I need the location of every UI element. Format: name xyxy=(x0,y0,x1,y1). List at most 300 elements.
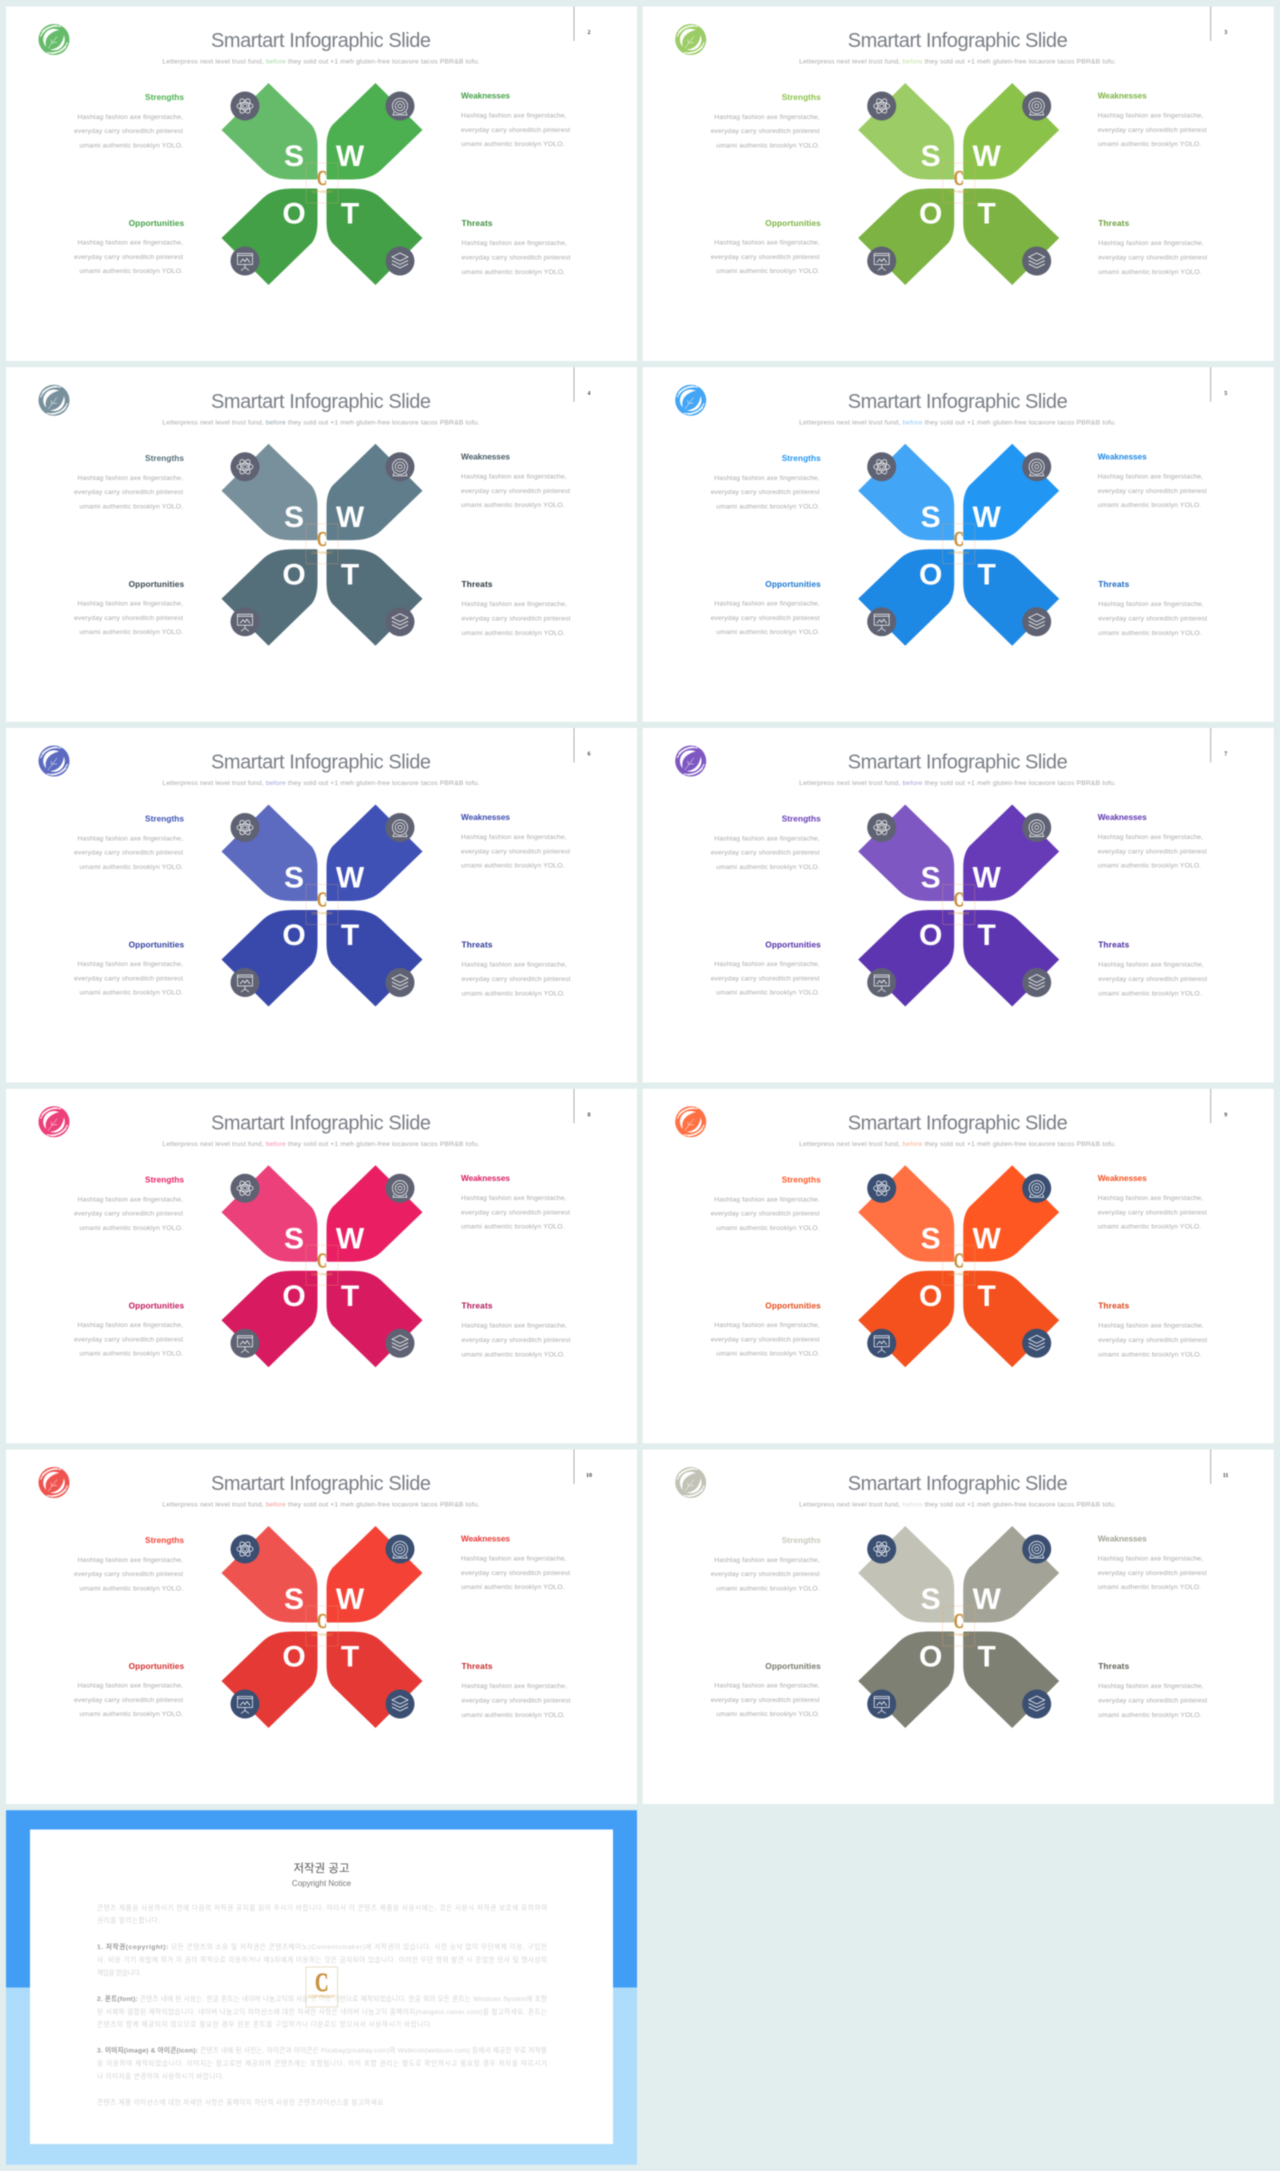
swot diagram xyxy=(858,804,1059,1006)
text block: strengths xyxy=(711,92,821,150)
text block: threats: umami authentic brooklyn YOLO. xyxy=(1098,1351,1202,1358)
text block: threats: Threats xyxy=(1098,1661,1130,1671)
text block: weaknesses: everyday carry shoreditch pinterest xyxy=(1098,127,1207,134)
text block: threats: everyday carry shoreditch pinterest xyxy=(1098,254,1207,262)
text block: threats xyxy=(462,579,571,637)
petal W: W xyxy=(336,1222,365,1255)
slide background xyxy=(643,728,1274,1082)
text block: opportunities xyxy=(74,1661,184,1718)
icon: layers xyxy=(1022,1329,1051,1358)
text block: opportunities: umami authentic brooklyn YOLO. xyxy=(716,629,820,636)
text block: threats: Threats xyxy=(462,1300,493,1310)
petal W xyxy=(326,1165,422,1262)
petal O: O xyxy=(919,1280,942,1313)
watermark: C xyxy=(954,1609,964,1633)
text block: strengths xyxy=(711,453,821,510)
logo xyxy=(38,746,70,776)
petal O xyxy=(222,549,318,646)
text block: strengths: umami authentic brooklyn YOLO. xyxy=(716,1225,820,1232)
petal T xyxy=(326,549,422,646)
text block: weaknesses: Weaknesses xyxy=(1098,812,1147,822)
text block: threats: umami authentic brooklyn YOLO. xyxy=(1098,1712,1202,1719)
text block: weaknesses: Weaknesses xyxy=(1098,1534,1147,1544)
text block: opportunities: Hashtag fashion axe fingerstache, xyxy=(714,240,820,246)
petal O: O xyxy=(919,558,942,591)
text block: opportunities: everyday carry shoreditch pinterest xyxy=(711,1697,820,1704)
petal W: W xyxy=(336,1583,365,1616)
petal W: W xyxy=(973,140,1002,173)
icon: atom xyxy=(867,813,896,842)
petal W xyxy=(326,83,422,180)
text block: strengths: umami authentic brooklyn YOLO. xyxy=(80,1225,183,1232)
text block: threats: everyday carry shoreditch pinterest xyxy=(462,1698,571,1704)
text block: threats: everyday carry shoreditch pinterest xyxy=(1098,1337,1207,1344)
text block: strengths: everyday carry shoreditch pinterest xyxy=(74,128,183,135)
petal W: W xyxy=(336,140,365,173)
text block: opportunities: umami authentic brooklyn YOLO. xyxy=(80,268,183,275)
text block: threats xyxy=(1098,1661,1207,1719)
slide 1: green xyxy=(6,6,637,361)
text block: opportunities: umami authentic brooklyn YOLO. xyxy=(80,1350,183,1357)
notice text: 사, 비용 기기 위법에 의거 이 권리 목적으로 이용하거나 제3자에게 이용하는 것은 금지되어 있습니다. 이러한 무단 행위 발견 시 준엄한 민사 및 형사상의 xyxy=(97,1955,547,1964)
icon: layers xyxy=(1022,246,1051,276)
text block: opportunities: Hashtag fashion axe fingerstache, xyxy=(714,1322,820,1329)
watermark: C xyxy=(317,527,327,551)
text block: strengths xyxy=(74,453,184,510)
text block: opportunities: everyday carry shoreditch pinterest xyxy=(711,976,820,982)
text block: weaknesses: Hashtag fashion axe fingerstache, xyxy=(1098,1195,1203,1202)
page number: 2 xyxy=(588,30,590,36)
slide background xyxy=(6,1450,637,1804)
text block: weaknesses: Hashtag fashion axe fingerstache, xyxy=(461,473,567,480)
watermark: C xyxy=(954,166,964,190)
petal S xyxy=(222,1526,318,1622)
text block: threats: everyday carry shoreditch pinterest xyxy=(462,254,571,262)
title: Smartart Infographic Slide xyxy=(211,1473,431,1495)
slide 3: blue grey xyxy=(6,367,637,722)
title: Smartart Infographic Slide xyxy=(848,1112,1068,1134)
text block: strengths: Strengths xyxy=(782,92,821,102)
text block: strengths: Strengths xyxy=(782,1535,821,1545)
text block: strengths: umami authentic brooklyn YOLO. xyxy=(80,142,183,150)
text block: opportunities: Opportunities xyxy=(765,218,821,228)
page number xyxy=(1211,1450,1228,1484)
text block: opportunities: everyday carry shoreditch pinterest xyxy=(74,615,183,622)
watermark: COPYRIGHT xyxy=(311,1272,333,1276)
icon: layers xyxy=(386,1690,414,1718)
subtitle: Letterpress next level trust fund, before they sold out +1 meh gluten-free locavore tacos PBR&B tofu. xyxy=(799,780,1116,787)
text block: strengths: Hashtag fashion axe fingerstache, xyxy=(714,475,820,482)
petal W xyxy=(963,83,1059,180)
text block: opportunities: everyday carry shoreditch pinterest xyxy=(74,976,183,982)
watermark: C xyxy=(317,888,327,912)
slide 2: light green xyxy=(643,6,1274,361)
icon: presentation xyxy=(867,968,896,997)
text block: opportunities: Hashtag fashion axe fingerstache, xyxy=(78,961,183,968)
text block: opportunities: everyday carry shoreditch pinterest xyxy=(74,1697,183,1704)
title: Smartart Infographic Slide xyxy=(211,752,431,774)
text block: weaknesses: umami authentic brooklyn YOLO. xyxy=(461,502,565,509)
text block: strengths: everyday carry shoreditch pinterest xyxy=(74,1210,183,1217)
petal T xyxy=(963,549,1059,646)
text block: opportunities xyxy=(74,940,184,996)
petal O xyxy=(858,910,954,1006)
icon: layers xyxy=(386,246,414,276)
text block: threats: Hashtag fashion axe fingerstache, xyxy=(1098,962,1204,968)
text block: weaknesses: Hashtag fashion axe fingerstache, xyxy=(461,1556,567,1562)
icon: presentation xyxy=(867,1690,896,1718)
logo xyxy=(675,746,706,776)
text block: threats: Threats xyxy=(462,579,493,589)
page number xyxy=(1211,728,1227,762)
icon: target xyxy=(386,813,414,842)
petal O xyxy=(858,188,954,285)
notice text: 1. 저작권(copyright): 모든 콘텐츠의 소유 및 저작권은 콘텐츠메이노(Contentsmaker)에 저작권이 있습니다. 사전 승낙 없이 무단복제 이용, 구입한 xyxy=(97,1942,547,1951)
watermark: C xyxy=(954,888,964,912)
panel: copyright notice xyxy=(6,1810,637,2165)
text block: threats: umami authentic brooklyn YOLO. xyxy=(1098,269,1202,276)
icon: atom xyxy=(867,92,896,120)
text block: opportunities: umami authentic brooklyn YOLO. xyxy=(80,629,183,636)
logo xyxy=(675,24,706,55)
text block: weaknesses xyxy=(1098,451,1207,509)
slide background xyxy=(643,367,1274,722)
slide 7: pink xyxy=(6,1089,637,1443)
icon: target xyxy=(386,1174,414,1203)
petal T xyxy=(963,910,1059,1006)
petal W: W xyxy=(973,862,1002,894)
text block: opportunities xyxy=(711,579,821,636)
icon: presentation xyxy=(230,1690,260,1718)
notice text: 권리를 알리는합니다. xyxy=(97,1916,160,1925)
text block: weaknesses: umami authentic brooklyn YOLO. xyxy=(1098,141,1201,148)
text block: weaknesses: Hashtag fashion axe fingerstache, xyxy=(461,1195,567,1202)
watermark: C xyxy=(317,166,327,190)
text block: weaknesses xyxy=(1098,812,1207,870)
text block: strengths: everyday carry shoreditch pinterest xyxy=(711,850,820,856)
page number xyxy=(574,6,590,41)
slide 8: deep orange xyxy=(643,1089,1274,1443)
text block: threats xyxy=(462,940,571,998)
icon: layers xyxy=(1022,1690,1051,1718)
icon: presentation xyxy=(867,246,896,276)
watermark: C xyxy=(317,1248,327,1272)
watermark: COPYRIGHT xyxy=(948,1633,970,1637)
swot diagram xyxy=(222,83,422,285)
page number: 6 xyxy=(588,752,590,758)
text block: opportunities: Hashtag fashion axe fingerstache, xyxy=(78,240,183,246)
title: Smartart Infographic Slide xyxy=(211,391,431,413)
icon: target xyxy=(1022,1174,1051,1203)
text block: threats: Threats xyxy=(462,940,493,950)
watermark: COPYRIGHT xyxy=(311,1633,333,1637)
petal W xyxy=(963,1165,1059,1262)
logo xyxy=(38,385,70,416)
text block: threats: umami authentic brooklyn YOLO. xyxy=(462,1351,565,1358)
text block: weaknesses: Weaknesses xyxy=(461,1534,510,1544)
text block: opportunities: Opportunities xyxy=(765,1661,821,1671)
slide background xyxy=(6,6,637,361)
text block: opportunities xyxy=(74,579,184,636)
petal T: T xyxy=(978,919,996,952)
text block: opportunities: Hashtag fashion axe fingerstache, xyxy=(78,1322,183,1329)
title: Smartart Infographic Slide xyxy=(848,391,1068,413)
watermark xyxy=(943,524,975,564)
text block: weaknesses: everyday carry shoreditch pinterest xyxy=(461,488,570,495)
text block: threats: Threats xyxy=(1098,218,1130,228)
text block: threats: everyday carry shoreditch pinterest xyxy=(1098,615,1207,622)
text block: threats: everyday carry shoreditch pinterest xyxy=(1098,1698,1207,1704)
petal S: S xyxy=(284,862,304,894)
text block: opportunities: Opportunities xyxy=(129,940,184,950)
text block: weaknesses xyxy=(461,1534,570,1591)
swot diagram xyxy=(858,444,1059,646)
logo xyxy=(38,1106,70,1137)
text block: threats xyxy=(462,1661,571,1719)
petal W xyxy=(963,1526,1059,1622)
text block: weaknesses: everyday carry shoreditch pinterest xyxy=(1098,1570,1207,1577)
slide background xyxy=(6,728,637,1082)
petal W: W xyxy=(973,1583,1002,1616)
petal S xyxy=(222,83,318,180)
swot diagram xyxy=(222,1526,422,1728)
subtitle: Letterpress next level trust fund, before they sold out +1 meh gluten-free locavore tacos PBR&B tofu. xyxy=(162,58,480,66)
text block: opportunities: umami authentic brooklyn YOLO. xyxy=(716,1350,820,1357)
icon: target xyxy=(386,92,414,120)
petal T: T xyxy=(341,1280,359,1313)
text block: strengths: umami authentic brooklyn YOLO. xyxy=(80,864,183,871)
text block: weaknesses: Hashtag fashion axe fingerstache, xyxy=(1098,834,1203,841)
petal S: S xyxy=(921,140,941,173)
watermark: COPYRIGHT xyxy=(308,1994,335,1999)
petal T xyxy=(963,1632,1059,1728)
text block: strengths: everyday carry shoreditch pinterest xyxy=(711,1210,820,1217)
slide background xyxy=(643,1450,1274,1804)
petal T: T xyxy=(341,558,359,591)
icon: target xyxy=(1022,813,1051,842)
text block: strengths: Hashtag fashion axe fingerstache, xyxy=(714,836,820,842)
icon: presentation xyxy=(230,968,260,997)
petal S: S xyxy=(284,1583,304,1616)
icon: atom xyxy=(867,1534,896,1564)
text block: opportunities: Opportunities xyxy=(129,579,184,589)
petal S xyxy=(222,804,318,901)
petal S xyxy=(858,83,954,180)
watermark: COPYRIGHT xyxy=(311,912,333,916)
watermark: C xyxy=(954,527,964,551)
petal W: W xyxy=(336,862,365,894)
watermark: COPYRIGHT xyxy=(948,912,970,916)
text block: weaknesses: Weaknesses xyxy=(461,451,510,461)
watermark xyxy=(943,884,975,924)
icon: presentation xyxy=(230,1329,260,1358)
page number xyxy=(1211,367,1227,402)
page number: 8 xyxy=(588,1112,590,1118)
subtitle: Letterpress next level trust fund, before they sold out +1 meh gluten-free locavore tacos PBR&B tofu. xyxy=(162,419,480,426)
text block: strengths: umami authentic brooklyn YOLO. xyxy=(80,503,183,510)
notice text: 콘텐츠 제품을 사용하시기 전에 다음의 저작권 공지를 읽어 주시기 바랍니다. 따라서 이 콘텐츠 제품을 사용시에는, 것은 사용시 저작권 보호에 유의하여 xyxy=(97,1903,547,1912)
watermark: COPYRIGHT xyxy=(311,551,333,555)
text block: opportunities: everyday carry shoreditch pinterest xyxy=(711,254,820,261)
text block: opportunities: Opportunities xyxy=(129,1661,184,1671)
icon: layers xyxy=(1022,607,1051,636)
text block: strengths: everyday carry shoreditch pinterest xyxy=(711,1571,820,1578)
text block: strengths: umami authentic brooklyn YOLO. xyxy=(716,864,820,871)
petal T: T xyxy=(341,198,359,230)
swot diagram xyxy=(858,83,1059,285)
title: Smartart Infographic Slide xyxy=(848,752,1068,774)
petal S: S xyxy=(921,1583,941,1616)
text block: weaknesses xyxy=(461,451,570,509)
text block: threats: everyday carry shoreditch pinterest xyxy=(462,615,571,622)
slide background xyxy=(6,1089,637,1443)
petal O: O xyxy=(282,1280,306,1313)
watermark xyxy=(306,884,338,924)
subtitle: Letterpress next level trust fund, before they sold out +1 meh gluten-free locavore tacos PBR&B tofu. xyxy=(162,1141,480,1148)
text block: strengths xyxy=(711,1535,821,1592)
petal T xyxy=(963,188,1059,285)
title: Smartart Infographic Slide xyxy=(211,30,431,52)
text block: threats: Threats xyxy=(1098,940,1130,950)
page number: 9 xyxy=(1224,1112,1227,1118)
text block: threats: umami authentic brooklyn YOLO. xyxy=(462,1712,565,1719)
white card xyxy=(30,1830,613,2144)
text block: strengths: Strengths xyxy=(782,453,821,463)
text block: weaknesses: Hashtag fashion axe fingerstache, xyxy=(1098,473,1203,480)
petal S xyxy=(858,444,954,540)
text block: strengths: Strengths xyxy=(782,1174,821,1184)
page number: 7 xyxy=(1224,752,1227,758)
text block: threats: Threats xyxy=(1098,579,1130,589)
text block: opportunities: umami authentic brooklyn YOLO. xyxy=(80,1711,183,1718)
petal O xyxy=(858,1632,954,1728)
text block: threats: Hashtag fashion axe fingerstache, xyxy=(1098,1322,1204,1329)
subtitle: Letterpress next level trust fund, before they sold out +1 meh gluten-free locavore tacos PBR&B tofu. xyxy=(162,780,480,787)
text block: threats: Hashtag fashion axe fingerstache, xyxy=(1098,240,1204,247)
text block: threats: umami authentic brooklyn YOLO. xyxy=(1098,630,1202,637)
page number: 4 xyxy=(588,391,590,397)
petal T xyxy=(326,910,422,1006)
text block: strengths xyxy=(74,1174,184,1232)
petal S: S xyxy=(284,501,304,534)
text block: weaknesses xyxy=(1098,91,1207,148)
text block: strengths: Strengths xyxy=(145,92,184,102)
text block: strengths: Hashtag fashion axe fingerstache, xyxy=(714,1557,820,1564)
text block: weaknesses: everyday carry shoreditch pinterest xyxy=(461,1209,570,1216)
icon: layers xyxy=(386,607,414,636)
petal S: S xyxy=(921,862,941,894)
petal T: T xyxy=(978,1640,996,1674)
text block: weaknesses: everyday carry shoreditch pinterest xyxy=(461,127,570,134)
icon: target xyxy=(1022,1534,1051,1564)
petal O: O xyxy=(282,1640,306,1674)
text block: threats: Threats xyxy=(1098,1300,1130,1310)
text block: weaknesses: Hashtag fashion axe fingerstache, xyxy=(1098,112,1203,120)
text block: strengths: everyday carry shoreditch pinterest xyxy=(74,1571,183,1578)
text block: weaknesses: umami authentic brooklyn YOLO. xyxy=(1098,1584,1201,1591)
subtitle: Letterpress next level trust fund, before they sold out +1 meh gluten-free locavore tacos PBR&B tofu. xyxy=(162,1502,480,1508)
icon: presentation xyxy=(230,246,260,276)
text block: strengths: Strengths xyxy=(145,814,184,824)
icon: atom xyxy=(867,452,896,481)
text block: strengths: Hashtag fashion axe fingerstache, xyxy=(78,1196,183,1203)
text block: threats: Hashtag fashion axe fingerstache, xyxy=(1098,601,1204,608)
text block: strengths: umami authentic brooklyn YOLO. xyxy=(80,1586,183,1592)
notice text: 을 이용하여 제작되었습니다. 이미지는 참고로만 제공되며 콘텐츠에는 포함됩니다. 이미 포함 권리는 별도로 확인하시고 필요할 경우 저자를 따르시거 xyxy=(97,2059,547,2068)
petal W xyxy=(326,1526,422,1622)
text block: weaknesses: everyday carry shoreditch pinterest xyxy=(461,1570,570,1577)
text block: weaknesses: Weaknesses xyxy=(461,91,510,101)
icon: presentation xyxy=(867,607,896,636)
icon: presentation xyxy=(230,607,260,636)
text block: strengths xyxy=(74,92,184,150)
petal S xyxy=(858,1165,954,1262)
icon: target xyxy=(386,1534,414,1564)
text block: strengths xyxy=(711,1174,821,1232)
slide background xyxy=(643,6,1274,361)
text block: weaknesses: umami authentic brooklyn YOLO. xyxy=(461,1584,565,1591)
text block: weaknesses: umami authentic brooklyn YOLO. xyxy=(1098,1223,1201,1230)
notice text: 3. 이미지(image) & 아이콘(icon): 콘텐츠 내에 된 사진는, 아이콘과 아이콘은 Pixabay(pixabay.com)와 Webicon(webicon.com) 등에서 제공한 무료 저작물 xyxy=(97,2046,547,2055)
subtitle: Letterpress next level trust fund, before they sold out +1 meh gluten-free locavore tacos PBR&B tofu. xyxy=(799,1502,1116,1508)
text block: threats xyxy=(1098,1300,1207,1358)
text block: weaknesses: umami authentic brooklyn YOLO. xyxy=(461,141,565,148)
petal O: O xyxy=(282,558,306,591)
lower light blue background xyxy=(6,1988,637,2165)
text block: weaknesses: Hashtag fashion axe fingerstache, xyxy=(1098,1556,1203,1562)
text block: opportunities: Opportunities xyxy=(129,1300,184,1310)
watermark: C xyxy=(954,1248,964,1272)
petal O: O xyxy=(919,198,942,230)
text block: opportunities: everyday carry shoreditch pinterest xyxy=(74,1336,183,1343)
page number: 3 xyxy=(1224,30,1227,36)
swot diagram xyxy=(858,1526,1059,1728)
petal T: T xyxy=(978,198,996,230)
watermark xyxy=(306,524,338,564)
text block: weaknesses: Weaknesses xyxy=(1098,91,1147,101)
slide background xyxy=(6,367,637,722)
icon: atom xyxy=(230,1174,260,1203)
swot diagram xyxy=(222,444,422,646)
text block: strengths: Hashtag fashion axe fingerstache, xyxy=(78,475,183,482)
icon: target xyxy=(1022,92,1051,120)
logo xyxy=(675,1106,706,1137)
text block: opportunities xyxy=(711,218,821,275)
text block: threats xyxy=(1098,940,1207,998)
text block: opportunities xyxy=(711,1661,821,1718)
text block: threats: umami authentic brooklyn YOLO. xyxy=(462,990,565,998)
text block: threats xyxy=(462,1300,571,1358)
text block: opportunities: Opportunities xyxy=(129,218,184,228)
page number: 5 xyxy=(1224,391,1227,397)
notice text: 2. 폰트(font): 콘텐츠 내에 된 사용는, 한글 폰트는 네이버 나눔고딕의 사용 및 이를 기반으로 제작되었습니다. 한글 외의 모든 폰트는 Windows System에 포함 xyxy=(97,1994,547,2003)
text block: weaknesses xyxy=(461,1173,570,1230)
text block: weaknesses: everyday carry shoreditch pinterest xyxy=(1098,488,1207,495)
text block: opportunities: Opportunities xyxy=(765,1300,821,1310)
petal S: S xyxy=(921,501,941,534)
text block: threats: everyday carry shoreditch pinterest xyxy=(462,1337,571,1344)
watermark xyxy=(943,1606,975,1646)
text block: opportunities: Hashtag fashion axe fingerstache, xyxy=(78,1682,183,1690)
text block: threats: everyday carry shoreditch pinterest xyxy=(462,976,571,983)
text block: opportunities xyxy=(74,1300,184,1357)
text block: weaknesses: umami authentic brooklyn YOLO. xyxy=(1098,502,1201,509)
petal O xyxy=(222,188,318,285)
text block: threats: umami authentic brooklyn YOLO. xyxy=(462,630,565,637)
text block: strengths: Strengths xyxy=(145,1174,184,1184)
petal W xyxy=(963,804,1059,901)
text block: weaknesses: Weaknesses xyxy=(1098,1173,1147,1183)
